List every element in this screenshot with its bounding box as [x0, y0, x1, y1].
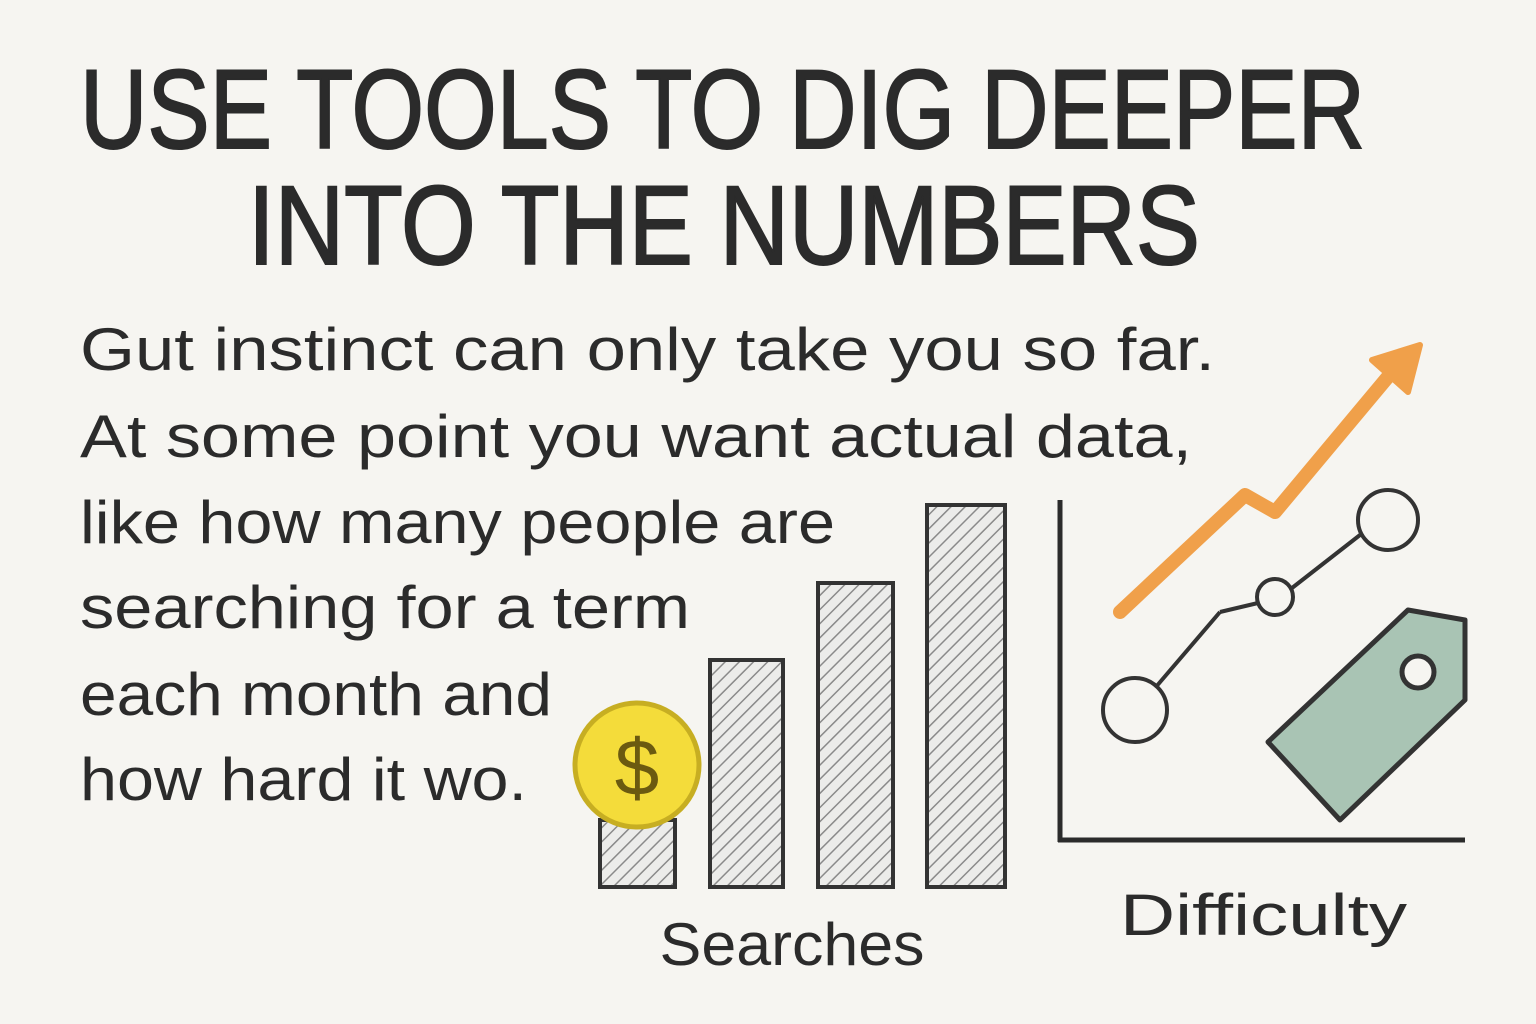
body text: searching for a term [80, 574, 690, 641]
arrow: rising trend [1120, 345, 1420, 612]
icon: dollar coin [575, 703, 699, 827]
icon: dollar coin: $ [615, 723, 659, 812]
title [80, 47, 1365, 288]
body text: like how many people are [80, 489, 835, 556]
body text: each month and [80, 661, 552, 728]
body text: how hard it wo. [80, 746, 527, 813]
label: difficulty: Difficulty [1120, 883, 1407, 948]
body text: At some point you want actual data, [80, 403, 1192, 470]
line chart [1103, 490, 1418, 742]
body text: Gut instinct can only take you so far. [80, 316, 1215, 383]
axes [1058, 500, 1465, 842]
bar chart: searches [600, 505, 1005, 887]
title: INTO THE NUMBERS [248, 163, 1200, 288]
icon: price tag [1268, 610, 1465, 820]
body text [80, 316, 1215, 813]
label: searches: Searches [660, 911, 924, 978]
